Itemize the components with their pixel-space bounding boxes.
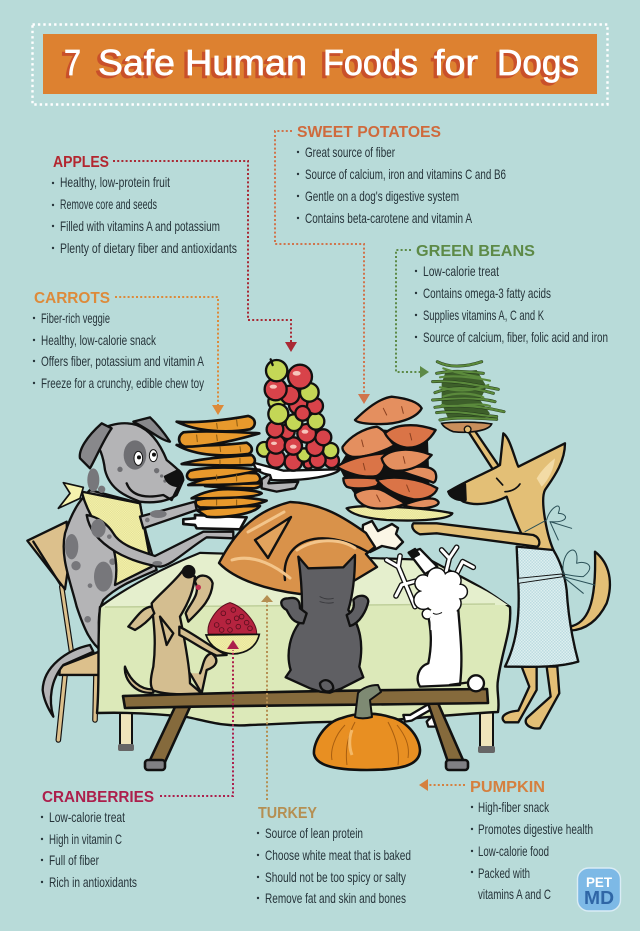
arrow: carrots [115,297,224,415]
illustration: cranberry bowl [206,603,259,654]
poodle limbs [387,547,473,607]
panel: carrots [33,290,204,391]
title banner: Foods [320,44,415,86]
arrow: apples [113,161,297,352]
panel: sweet potatoes: Contains beta-carotene and vitamin A [305,210,472,226]
illustration: apples on plate [253,359,340,480]
panel: carrots: Offers fiber, potassium and vitamin A [41,353,204,369]
dog raised arm [466,426,502,473]
panel: sweet potatoes: SWEET POTATOES [297,124,441,141]
illustration: green beans [433,362,504,433]
title banner: Dogs [494,44,576,86]
panel: carrots: CARROTS [34,290,110,307]
panel: cranberries: Full of fiber [49,852,99,868]
panel: pumpkin: Promotes digestive health [478,821,593,837]
panel: apples: Remove core and seeds [60,196,157,212]
dog apron [505,547,578,667]
panel: apples: Healthy, low-protein fruit [60,174,170,190]
illustration: grey dog [43,417,298,717]
panel: turkey: Choose white meat that is baked [265,847,411,863]
dog body [64,490,157,652]
illustration: tablecloth [97,553,510,725]
panel: turkey: Remove fat and skin and bones [265,890,406,906]
panel: pumpkin: Packed with [478,865,530,881]
poodle body [418,610,461,687]
panel: cranberries: Low-calorie treat [49,809,125,825]
panel: turkey: Should not be too spicy or salty [265,869,406,885]
illustration: tan dog in apron [412,426,610,729]
panel: apples: Filled with vitamins A and potassium [60,218,220,234]
panel: sweet potatoes: Great source of fiber [305,144,395,160]
dog tail [43,645,93,717]
illustration: cat [281,555,368,693]
turkey leg bones [362,521,403,552]
panel: sweet potatoes: Gentle on a dog's digestive system [305,188,459,204]
dog tail [570,552,610,631]
poodle head [409,549,437,574]
arrow: cranberries [160,640,239,796]
title banner [32,24,608,104]
illustration: back table legs [118,708,495,753]
title banner: 7 [61,44,78,86]
panel: sweet potatoes [297,124,506,226]
panel: cranberries: High in vitamin C [49,831,122,847]
panel: apples: Plenty of dietary fiber and antioxidants [60,240,237,256]
dog arm [412,523,539,547]
dog head and neck [448,433,565,557]
panel: apples [52,154,237,256]
poodle fluff [414,568,467,619]
panel: pumpkin: vitamins A and C [478,886,551,902]
logo: PetMD: PET [586,874,612,890]
panel: green beans: Low-calorie treat [423,263,499,279]
logo: PetMD [578,868,620,911]
dog arms [140,502,197,528]
arrow: sweet potatoes [275,131,370,404]
illustration: carrots on plate [177,416,267,529]
title banner: Safe [95,44,172,86]
arrow: pumpkin [419,779,465,791]
panel: turkey: TURKEY [258,805,317,822]
panel: carrots: Healthy, low-calorie snack [41,332,157,348]
illustration: bench [123,689,488,770]
illustration: turkey [219,502,403,594]
panel: carrots: Fiber-rich veggie [41,310,110,326]
panel: green beans [415,243,608,345]
title banner: Safe [98,42,175,83]
panel: cranberries: Rich in antioxidants [49,874,137,890]
illustration: pumpkin [314,685,420,770]
panel: pumpkin: PUMPKIN [470,779,545,796]
illustration: poodle feet [403,703,440,727]
panel: pumpkin: High-fiber snack [478,799,550,815]
panel: sweet potatoes: Source of calcium, iron and vitamins C and B6 [305,166,506,182]
panel: green beans: Contains omega-3 fatty acids [423,285,551,301]
illustration: poodle [387,547,484,691]
panel: turkey: Source of lean protein [265,825,363,841]
panel: pumpkin [470,779,593,902]
illustration: sweet potatoes [337,397,452,521]
title banner: for [431,44,475,86]
panel: carrots: Freeze for a crunchy, edible chew toy [41,375,204,391]
title banner: 7 [64,42,81,83]
panel: apples: APPLES [53,154,109,171]
title banner: Foods [323,42,418,83]
panel: green beans: GREEN BEANS [416,243,535,260]
title banner: Dogs [497,42,579,83]
dog spots [65,468,116,623]
dog bandana [82,492,152,585]
illustration: small tan dog [125,566,227,694]
arrow: green beans [396,250,429,378]
title banner: for [434,42,478,83]
panel: cranberries: CRANBERRIES [42,789,154,806]
dog head [92,423,183,502]
turkey body [219,502,377,594]
dog legs [503,667,537,722]
poodle tail [450,683,467,685]
panel: turkey [257,805,411,906]
arrow: turkey [261,595,273,800]
title banner: Human [182,44,304,86]
title banner: Human [185,42,307,83]
panel: pumpkin: Low-calorie food [478,843,549,859]
panel: green beans: Supplies vitamins A, C and K [423,307,544,323]
panel: cranberries [41,789,154,890]
logo: PetMD: MD [584,888,614,908]
illustration: chair [27,522,105,740]
